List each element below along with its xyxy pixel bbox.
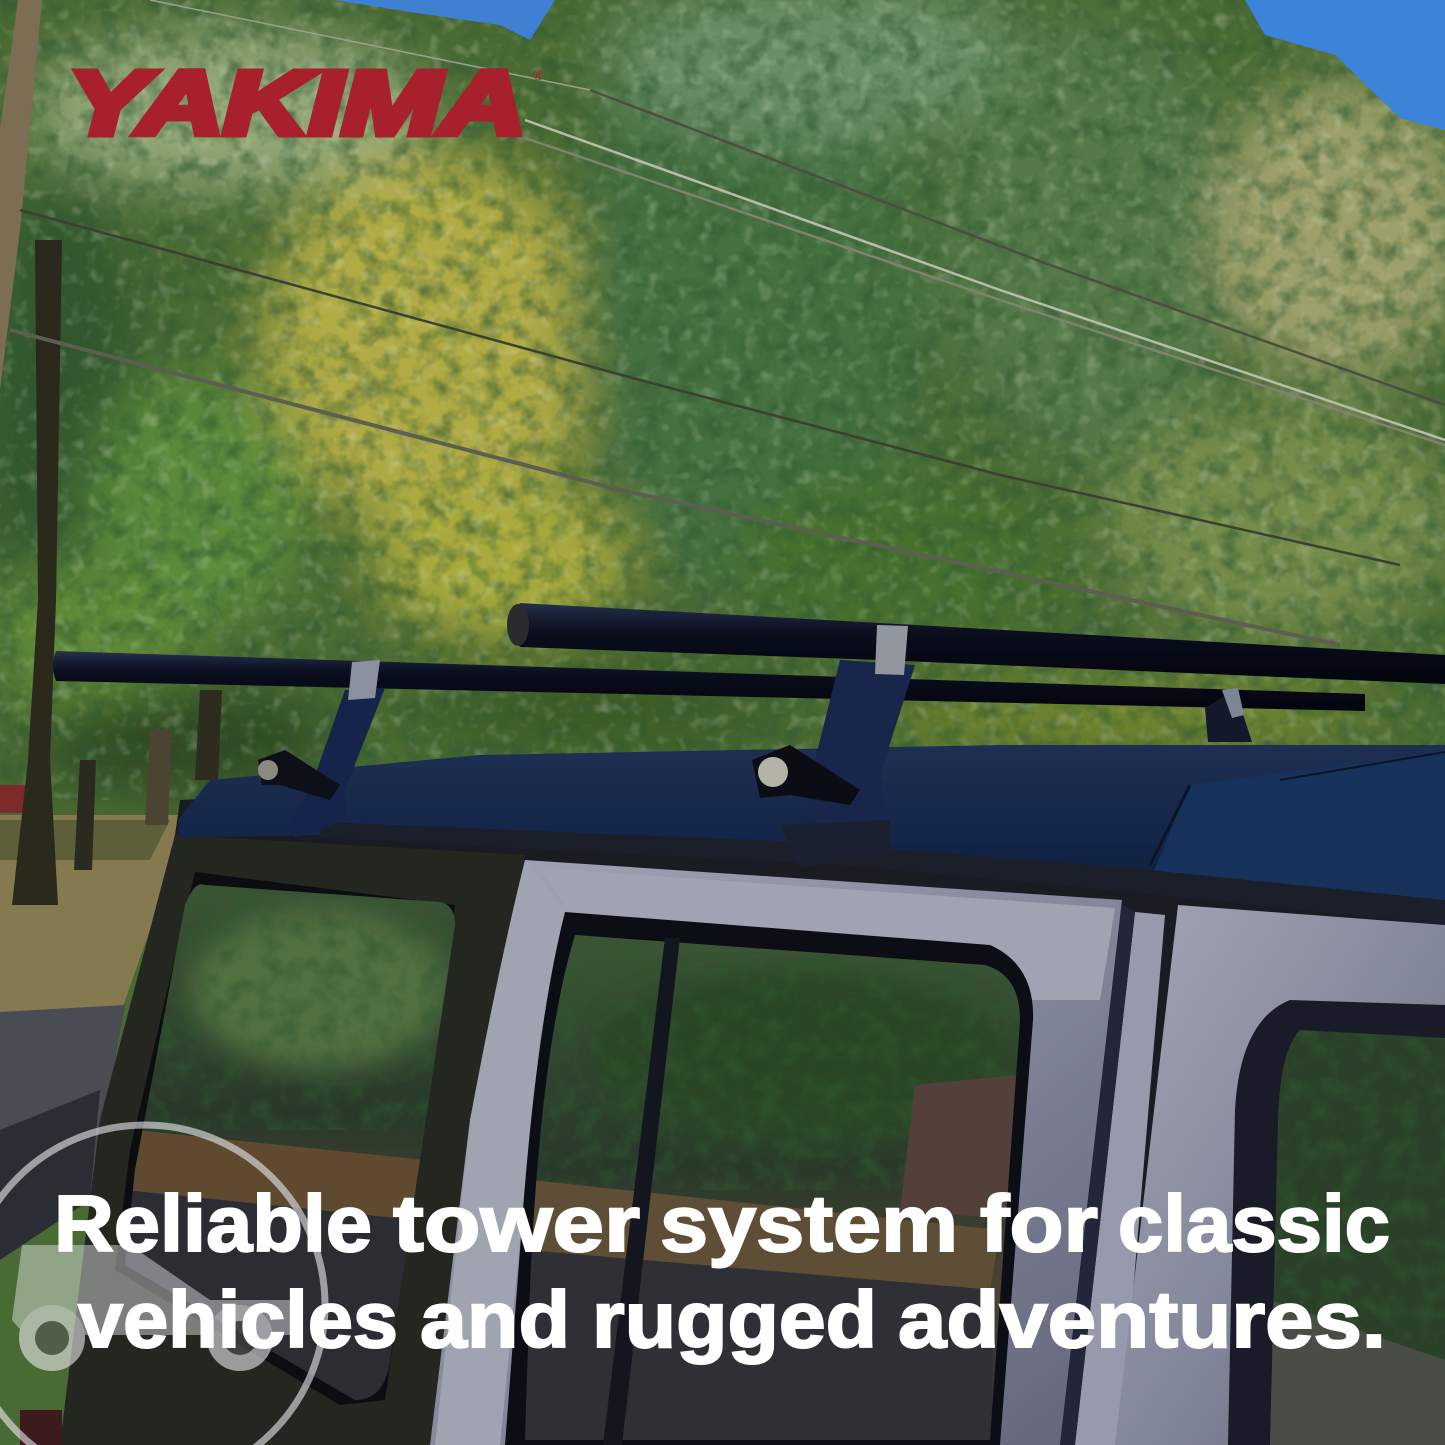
rear-left tower bbox=[288, 688, 385, 838]
ground, grass and road bbox=[0, 815, 190, 1015]
caption: and bbox=[420, 1275, 570, 1364]
power lines bbox=[10, 0, 1445, 645]
caption: tower bbox=[393, 1179, 640, 1268]
logo: Yakima: YAKIMA bbox=[68, 54, 526, 154]
rear crossbar bbox=[53, 651, 1365, 711]
roof rack bbox=[53, 603, 1445, 868]
window: front door bbox=[1228, 1000, 1445, 1445]
caption: classic bbox=[1118, 1179, 1390, 1268]
blue roof bbox=[178, 745, 1445, 918]
front crossbar bbox=[512, 603, 1445, 684]
caption: vehicles bbox=[78, 1275, 398, 1364]
sky bbox=[335, 0, 555, 40]
caption: for bbox=[980, 1179, 1098, 1268]
front-left tower bbox=[805, 660, 915, 845]
caption: adventures. bbox=[898, 1275, 1386, 1364]
window: rear quarter bbox=[115, 872, 455, 1405]
silver front door bbox=[1115, 905, 1445, 1445]
caption: Reliable bbox=[54, 1179, 372, 1268]
tree trunks and utility pole bbox=[0, 0, 42, 390]
dark hardtop rear panel bbox=[60, 835, 525, 1445]
caption bbox=[54, 1179, 1390, 1364]
roof gutter trim bbox=[320, 822, 1445, 925]
body silhouette bbox=[60, 745, 1445, 1445]
window: rear door bbox=[505, 912, 1033, 1445]
vehicle body bbox=[20, 745, 1445, 1445]
logo: Yakima: ® bbox=[533, 67, 544, 83]
tail light hint bbox=[20, 1410, 62, 1445]
caption: system bbox=[660, 1179, 958, 1268]
icon: vehicle roof badge bbox=[0, 1125, 325, 1445]
caption: rugged bbox=[592, 1275, 877, 1364]
far right tower bbox=[1205, 690, 1252, 742]
foliage colour masses bbox=[0, 0, 1445, 790]
silver door pillar bbox=[1075, 912, 1165, 1445]
foliage texture bbox=[0, 0, 1445, 800]
silver rear door bbox=[430, 860, 1122, 1445]
